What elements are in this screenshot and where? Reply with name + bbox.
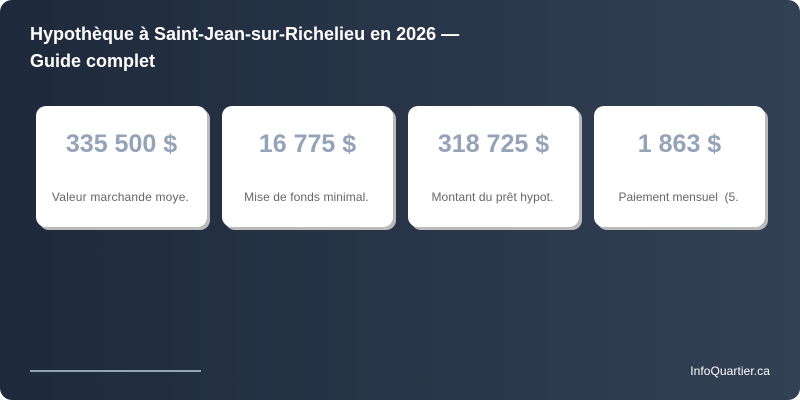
label: down payment: Mise de fonds minimal.	[244, 190, 369, 204]
value: down payment: 16 775 $	[259, 130, 356, 158]
value: monthly payment: 1 863 $	[638, 130, 721, 158]
label: monthly payment: Paiement mensuel (5.	[618, 190, 739, 204]
label: market value: Valeur marchande moye.	[52, 190, 189, 204]
card: down payment	[222, 106, 393, 227]
footer accent line	[30, 370, 201, 372]
title: Guide complet	[30, 51, 155, 71]
brand name: InfoQuartier.ca	[690, 364, 770, 378]
card: monthly payment	[594, 106, 765, 227]
card: market value	[36, 106, 207, 227]
title: Hypothèque à Saint-Jean-sur-Richelieu en 2026 —	[30, 24, 459, 44]
title	[30, 24, 460, 71]
label: loan amount: Montant du prêt hypot.	[431, 190, 554, 204]
value: loan amount: 318 725 $	[438, 130, 549, 158]
card: loan amount	[408, 106, 579, 227]
value: market value: 335 500 $	[66, 130, 177, 158]
